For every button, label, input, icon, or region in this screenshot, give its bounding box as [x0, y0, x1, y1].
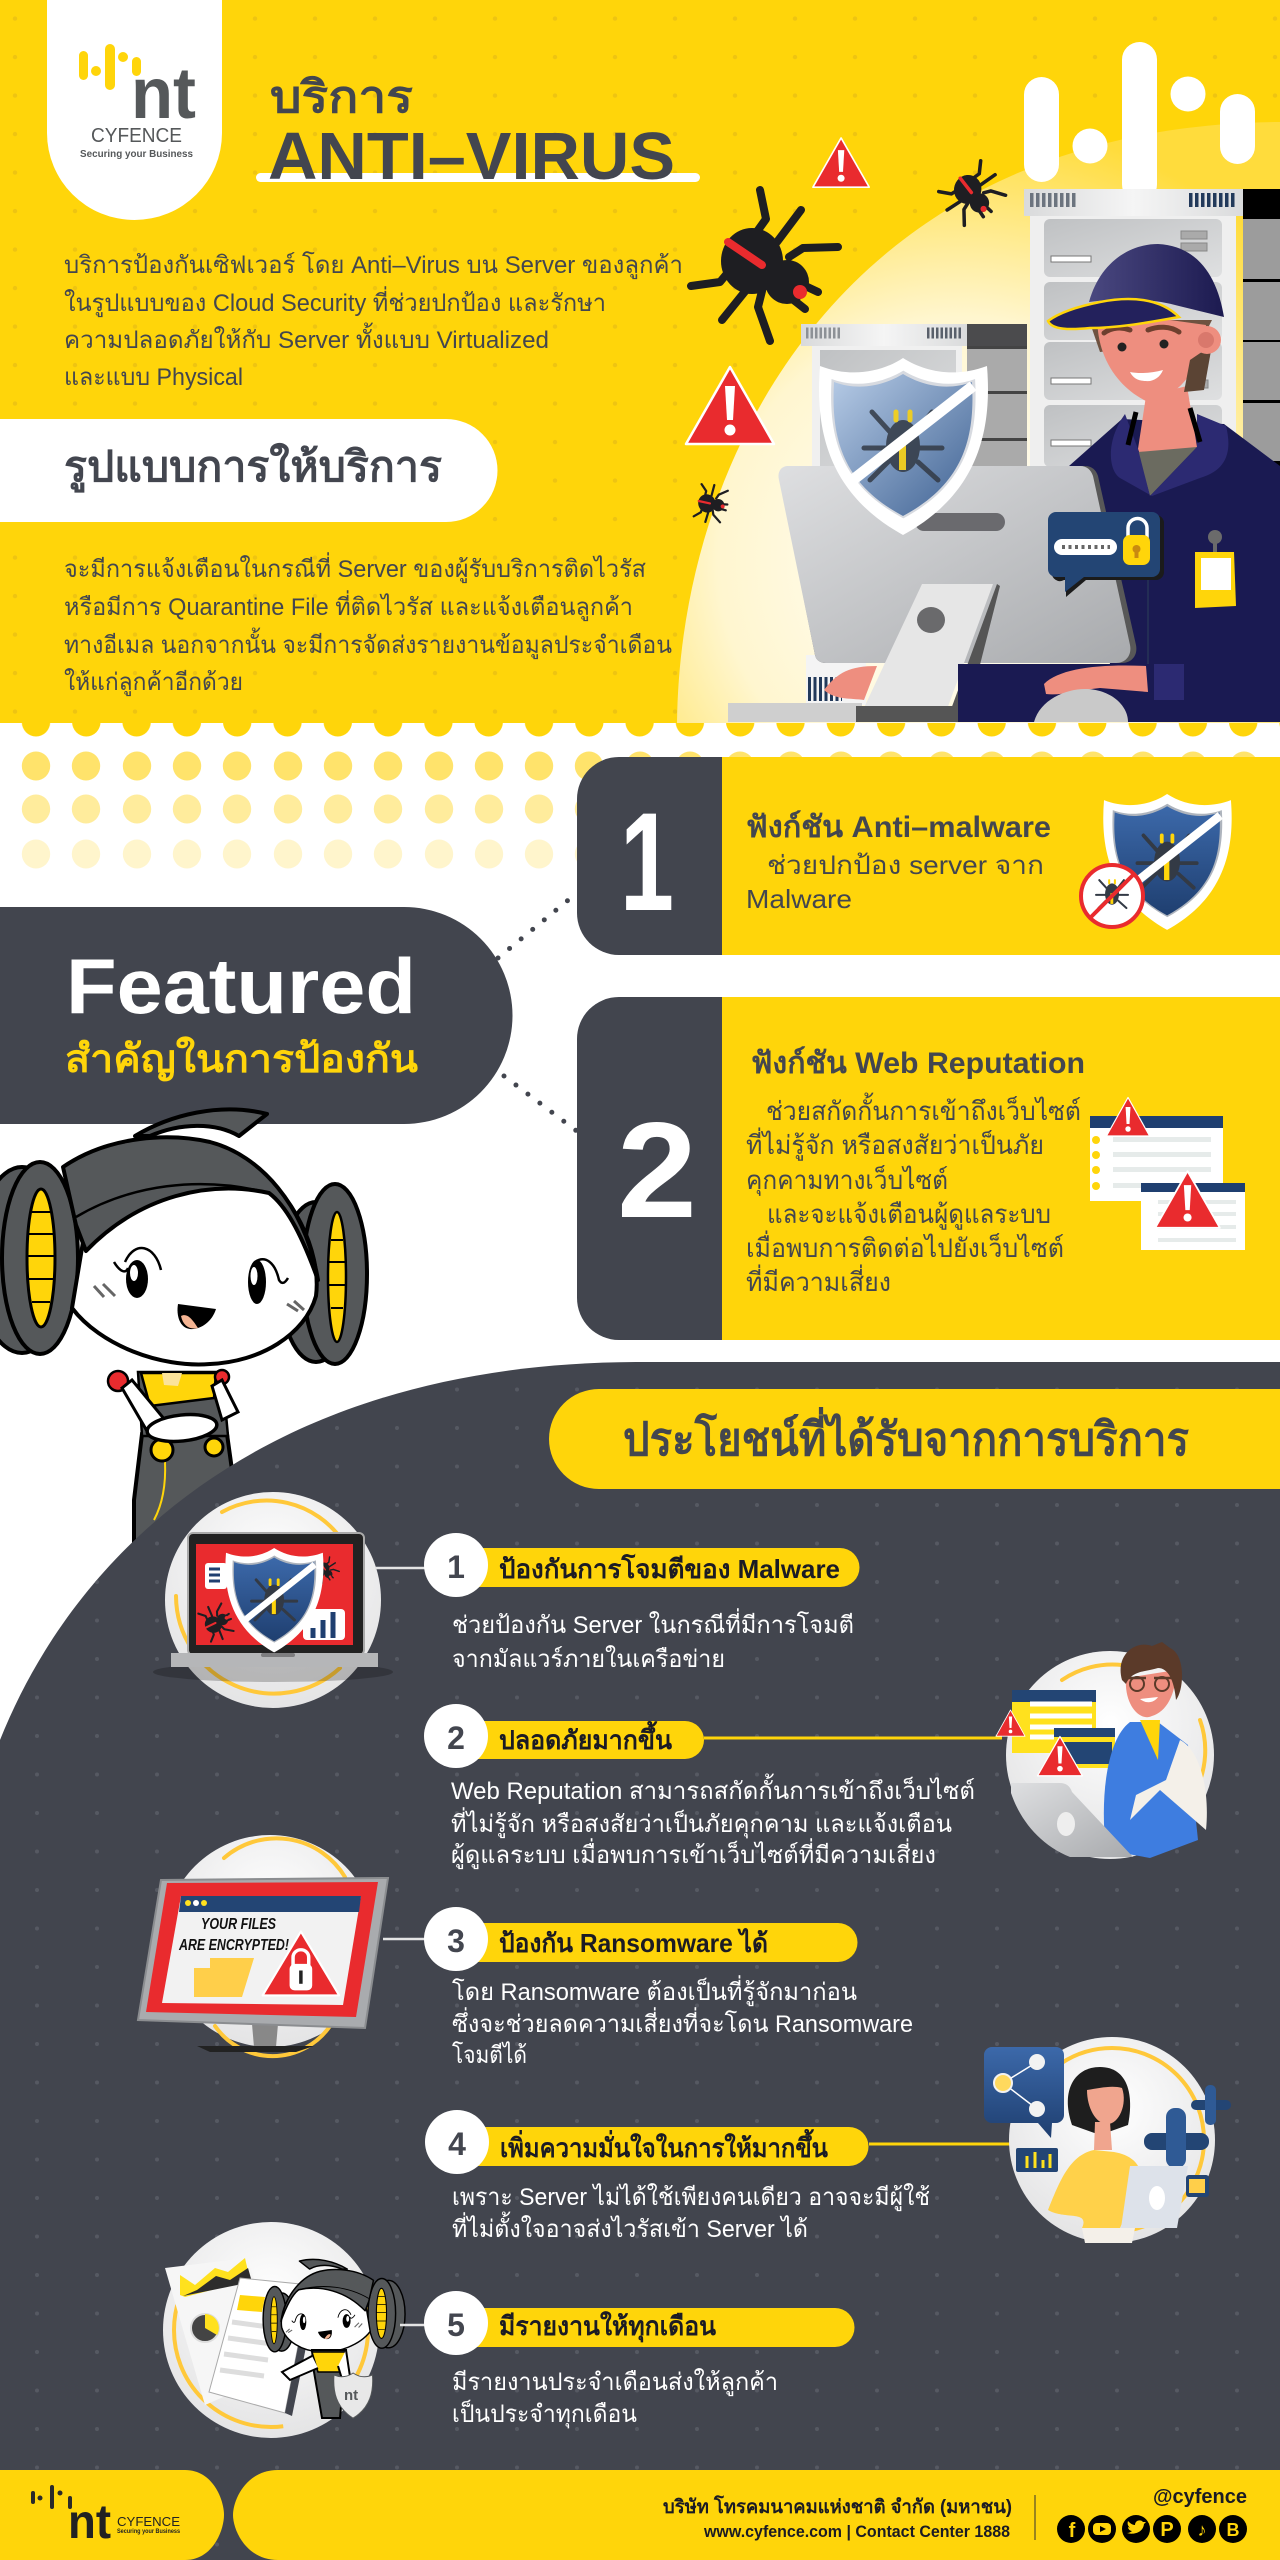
text: CYFENCE: CYFENCE — [91, 125, 182, 147]
text: benefit 1 description — [452, 1608, 854, 1673]
text: ransom message — [178, 1916, 290, 1954]
icon: social icons: ♪ — [1198, 2520, 1206, 2540]
panel: benefits background — [0, 1362, 1280, 2560]
icon: logo bars — [79, 44, 141, 90]
text: benefit 2 description: Web Reputation สามารถสกัดกั้นการเข้าถึงเว็บไซต์ — [451, 1773, 975, 1805]
title: ANTI–VIRUS — [268, 119, 675, 194]
text: footer logo: nt — [68, 2496, 111, 2549]
illustration: back server rack — [801, 324, 1027, 705]
text: benefit 4 description: ที่ไม่ตั้งใจอาจส่งไวรัสเข้า Server ได้ — [452, 2211, 808, 2243]
text: feature 2 copy: ที่ไม่รู้จัก หรือสงสัยว่าเป็นภัย — [746, 1127, 1044, 1161]
illustration: mascot head — [0, 1109, 367, 1364]
text: tagline: Securing your Business — [80, 148, 193, 160]
text: benefit 4 description: เพราะ Server ไม่ได้ใช้เพียงคนเดียว อาจจะมีผู้ใช้ — [452, 2183, 930, 2212]
benefit 4: 4 — [448, 2126, 466, 2162]
icon: big red bug — [691, 190, 838, 341]
illustration: man with web alerts — [996, 1642, 1214, 1859]
text: benefit 3 description: ซึ่งจะช่วยลดความเสี่ยงที่จะโดน Ransomware — [452, 2007, 913, 2038]
text: feature 2 copy: ช่วยสกัดกั้นการเข้าถึงเว็บไซต์ — [766, 1092, 1081, 1126]
illustration: woman with tablet — [984, 2037, 1231, 2243]
heading: service format pill — [0, 419, 498, 522]
icon: social icons: B — [1226, 2520, 1240, 2540]
icon: mini shield — [334, 2373, 373, 2418]
illustration: technician arms and hands — [824, 664, 1184, 722]
arrow: dotted connectors — [498, 892, 578, 1132]
icon: browser alert windows — [1090, 1098, 1245, 1250]
icon: social icons: f — [1069, 2520, 1076, 2542]
illustration: mascot body — [108, 1370, 238, 1545]
text: footer CYFENCE: CYFENCE — [117, 2514, 180, 2529]
benefit 2: ปลอดภัยมากขึ้น — [499, 1720, 672, 1755]
text: feature 2 copy: ที่มีความเสี่ยง — [746, 1264, 891, 1297]
benefit 3: ป้องกัน Ransomware ได้ — [499, 1927, 768, 1958]
text: benefit 5 description: มีรายงานประจำเดือนส่งให้ลูกค้า — [452, 2368, 778, 2397]
icon: small bug top — [931, 151, 1013, 235]
text block: service format: จะมีการแจ้งเตือนในกรณีที่ Server ของผู้รับบริการติดไวรัส — [64, 552, 646, 584]
text block: intro: และแบบ Physical — [64, 364, 243, 391]
illustration: technician body — [958, 386, 1280, 722]
icon: small bug bottom — [684, 476, 738, 531]
icon: large logo bars — [1024, 42, 1255, 202]
illustration: laptop with shield — [153, 1492, 393, 1708]
text block: service format: ทางอีเมล นอกจากนั้น จะมีการจัดส่งรายงานข้อมูลประจำเดือน — [64, 627, 672, 660]
illustration: stand — [862, 584, 1000, 712]
text: benefit 2 description: ผู้ดูแลระบบ เมื่อพบการเข้าเว็บไซต์ที่มีความเสี่ยง — [451, 1838, 936, 1870]
text: feature 2 copy: เมื่อพบการติดต่อไปยังเว็บไซต์ — [746, 1230, 1064, 1263]
footer: contact bar — [233, 2470, 1280, 2560]
text: shield logo: nt — [344, 2387, 358, 2404]
text: benefit 1 description: ช่วยป้องกัน Server ในกรณีที่มีการโจมตี — [452, 1608, 854, 1639]
icon: social icons: P — [1160, 2519, 1174, 2541]
illustration: monitor — [728, 466, 1136, 722]
text: feature 2 copy — [746, 1046, 1085, 1297]
text: ransom message: ARE ENCRYPTED! — [178, 1937, 290, 1954]
text block: intro: ความปลอดภัยให้กับ Server ทั้งแบบ Virtualized — [64, 322, 549, 354]
icon: social icons — [1057, 2515, 1247, 2543]
benefit 5 — [400, 2291, 855, 2429]
panel: yellow header — [0, 0, 1280, 723]
text: benefit 3 description — [452, 1975, 913, 2069]
icon: footer logo bars — [31, 2485, 72, 2509]
text: benefit 3 description: โดย Ransomware ต้องเป็นที่รู้จักมาก่อน — [452, 1975, 857, 2007]
text block: intro — [64, 251, 683, 391]
text block: intro: ในรูปแบบของ Cloud Security ที่ช่วยปกป้อง และรักษา — [64, 286, 606, 318]
benefit 5: มีรายงานให้ทุกเดือน — [499, 2311, 716, 2343]
icon: warning triangle large — [686, 367, 774, 444]
benefit 3 — [383, 1907, 913, 2069]
illustration: glowing dome — [677, 122, 1280, 723]
title — [256, 73, 700, 194]
illustration: password bubble — [1048, 512, 1164, 597]
panel: featured: สำคัญในการป้องกัน — [65, 1036, 418, 1082]
text: benefit 3 description: โจมตีได้ — [452, 2041, 527, 2069]
panel: logo card — [47, 0, 222, 220]
text: number 1: 1 — [620, 783, 674, 940]
benefit 4 — [425, 2110, 1010, 2243]
text: social handle: @cyfence — [1153, 2486, 1247, 2508]
benefit 3: 3 — [447, 1923, 465, 1959]
text: company name: บริษัท โทรคมนาคมแห่งชาติ จำกัด (มหาชน) — [663, 2495, 1012, 2518]
illustration: report and mini mascot — [163, 2222, 405, 2438]
heading: service format pill: รูปแบบการให้บริการ — [64, 442, 442, 493]
text: feature 1 copy: ฟังก์ชัน Anti–malware — [746, 810, 1051, 844]
text: benefit 2 description: ที่ไม่รู้จัก หรือสงสัยว่าเป็นภัยคุกคาม และแจ้งเตือน — [451, 1807, 952, 1839]
benefit 4: เพิ่มความมั่นใจในการให้มากขึ้น — [500, 2128, 828, 2163]
benefit 5: 5 — [447, 2307, 465, 2343]
panel: featured: Featured — [66, 942, 416, 1030]
icon: warning triangle small — [813, 138, 869, 187]
icon: shield and no-bug badge — [1081, 794, 1232, 930]
text: feature 2 copy: และจะแจ้งเตือนผู้ดูแลระบบ — [767, 1199, 1051, 1230]
text: benefit 1 description: จากมัลแวร์ภายในเครือข่าย — [452, 1645, 725, 1673]
benefit 1: 1 — [447, 1549, 465, 1585]
benefit 2: 2 — [447, 1720, 465, 1756]
text block: service format: ให้แก่ลูกค้าอีกด้วย — [64, 668, 243, 697]
footer: logo pill — [0, 2470, 224, 2560]
text: benefit 5 description — [452, 2368, 778, 2429]
text: benefit 2 description — [451, 1773, 975, 1870]
title: บริการ — [270, 73, 413, 122]
heading: benefits pill: ประโยชน์ที่ได้รับจากการบริการ — [623, 1407, 1189, 1465]
illustration: front server rack — [1024, 189, 1280, 489]
text: feature 1 copy: ช่วยปกป้อง server จาก — [767, 850, 1044, 880]
benefit 2 — [424, 1704, 1002, 1870]
text: footer tagline: Securing your Business — [117, 2529, 181, 2535]
panel: feature 1 — [577, 757, 1280, 955]
illustration: technician head — [1048, 244, 1224, 403]
illustration: mini mascot — [263, 2259, 405, 2352]
text: feature 1 copy: Malware — [746, 884, 852, 914]
text: feature 2 copy: คุกคามทางเว็บไซต์ — [746, 1164, 948, 1196]
icon: shield with crossed bug — [819, 358, 988, 535]
text: number 2: 2 — [617, 1094, 697, 1246]
illustration: id badge — [1195, 530, 1236, 608]
text: feature 1 copy — [746, 810, 1051, 914]
panel: featured — [0, 907, 512, 1124]
text: ransom message: YOUR FILES — [201, 1916, 276, 1933]
text: feature 2 copy: ฟังก์ชัน Web Reputation — [751, 1046, 1085, 1080]
illustration: monitor encrypted — [138, 1835, 388, 2056]
text: website and contact: www.cyfence.com | Contact Center 1888 — [703, 2522, 1010, 2541]
text block: service format: หรือมีการ Quarantine File ที่ติดไวรัส และแจ้งเตือนลูกค้า — [64, 590, 633, 622]
heading: benefits pill — [549, 1389, 1280, 1489]
text block: service format — [64, 552, 672, 697]
benefit 1 — [375, 1533, 860, 1673]
decoration: scalloped dots — [0, 723, 1280, 868]
text block: intro: บริการป้องกันเซิฟเวอร์ โดย Anti–Virus บน Server ของลูกค้า — [64, 251, 683, 280]
text: logo wordmark: nt — [131, 54, 196, 134]
text: benefit 4 description — [452, 2183, 930, 2243]
text: benefit 5 description: เป็นประจำทุกเดือน — [452, 2399, 637, 2429]
benefit 1: ป้องกันการโจมตีของ Malware — [499, 1553, 840, 1584]
panel: feature 2 — [577, 997, 1280, 1340]
illustration: mascot — [0, 1109, 367, 1545]
